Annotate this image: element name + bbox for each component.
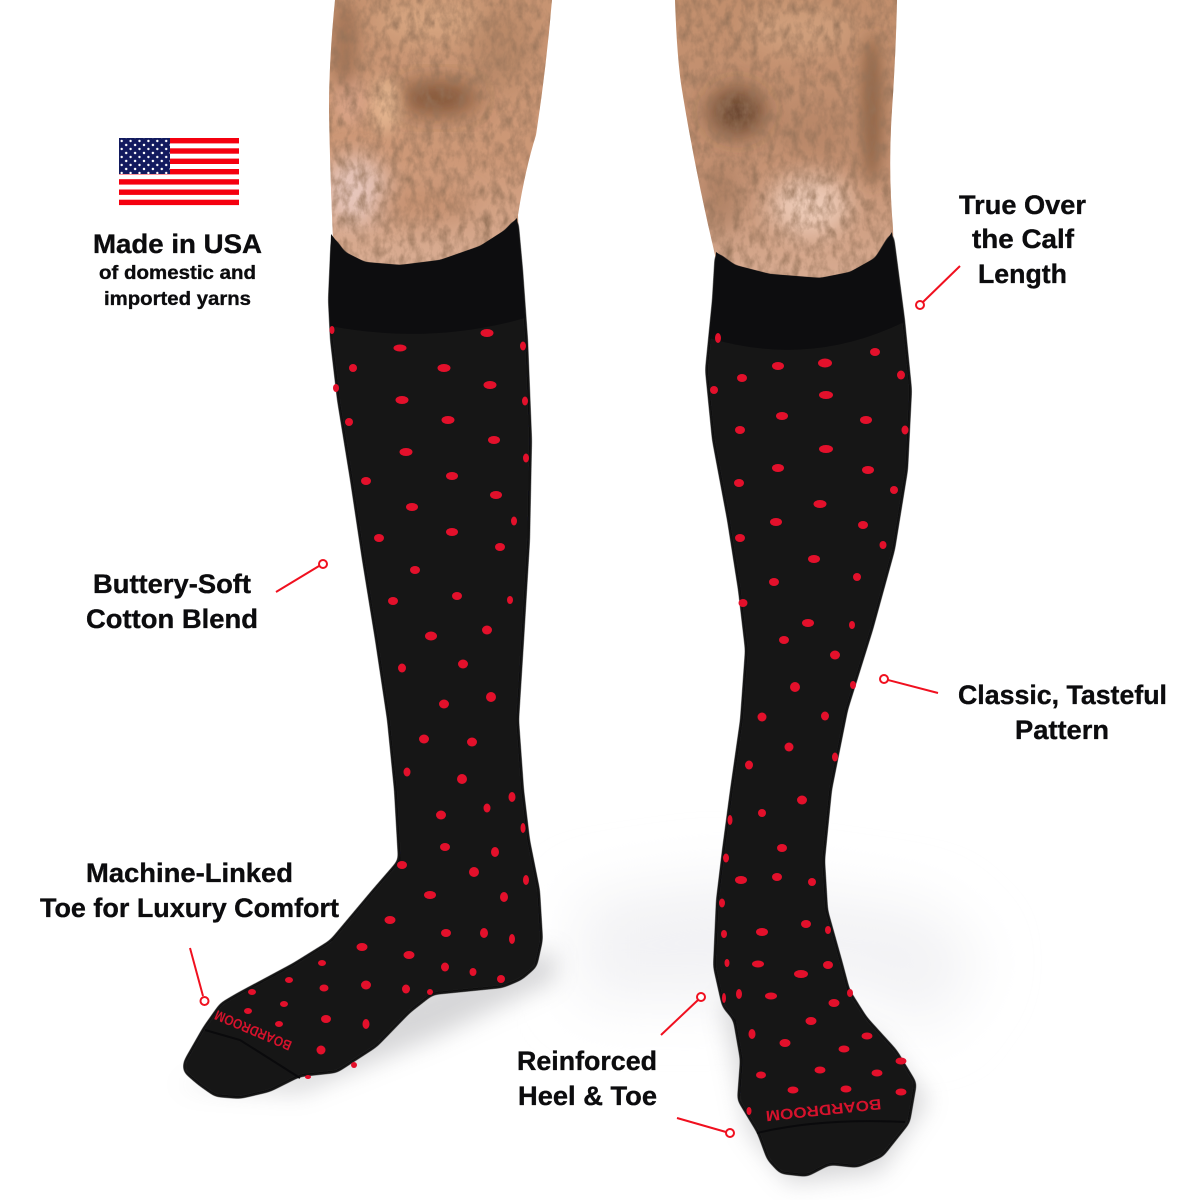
sock cuff xyxy=(329,218,525,334)
text: made in USA: Made in USA xyxy=(93,229,262,259)
right leg skin xyxy=(675,0,897,278)
text: made in USA: imported yarns xyxy=(104,288,251,310)
callout: machine-linked toe xyxy=(40,858,339,1005)
callout: machine-linked toe: Machine-Linked xyxy=(86,858,293,888)
callout: classic tasteful pattern xyxy=(880,675,1167,745)
callout: classic tasteful pattern: Pattern xyxy=(1015,715,1109,745)
floor shadow xyxy=(175,880,980,1183)
toe seam xyxy=(205,1030,300,1078)
right sock xyxy=(705,228,917,1177)
callout: machine-linked toe: Toe for Luxury Comfort xyxy=(40,893,339,923)
toe seam xyxy=(757,1121,905,1133)
callout: reinforced heel and toe xyxy=(517,993,734,1137)
callout: buttery-soft cotton blend: Buttery-Soft xyxy=(93,569,251,599)
callout: true over the calf length xyxy=(916,190,1086,309)
text: made in USA xyxy=(93,229,262,310)
callout: true over the calf length: the Calf xyxy=(972,224,1075,254)
text: made in USA: of domestic and xyxy=(99,262,256,284)
callout: reinforced heel and toe: Reinforced xyxy=(517,1046,657,1076)
callout: true over the calf length: Length xyxy=(978,259,1067,289)
callout: buttery-soft cotton blend: Cotton Blend xyxy=(86,604,258,634)
callout: reinforced heel and toe: Heel & Toe xyxy=(518,1081,657,1111)
callout: true over the calf length: True Over xyxy=(959,190,1086,220)
sock cuff xyxy=(709,232,904,350)
brand text on right sock: BOARDROOM xyxy=(765,1095,882,1124)
polka dots xyxy=(710,333,908,1115)
brand text on left sock: BOARDROOM xyxy=(212,1007,294,1054)
polka dots xyxy=(244,326,529,1079)
left leg skin xyxy=(329,0,552,265)
icon: US flag xyxy=(119,138,239,205)
left sock xyxy=(183,215,543,1099)
callout: classic tasteful pattern: Classic, Tasteful xyxy=(958,680,1167,710)
callout: buttery-soft cotton blend xyxy=(86,560,327,634)
